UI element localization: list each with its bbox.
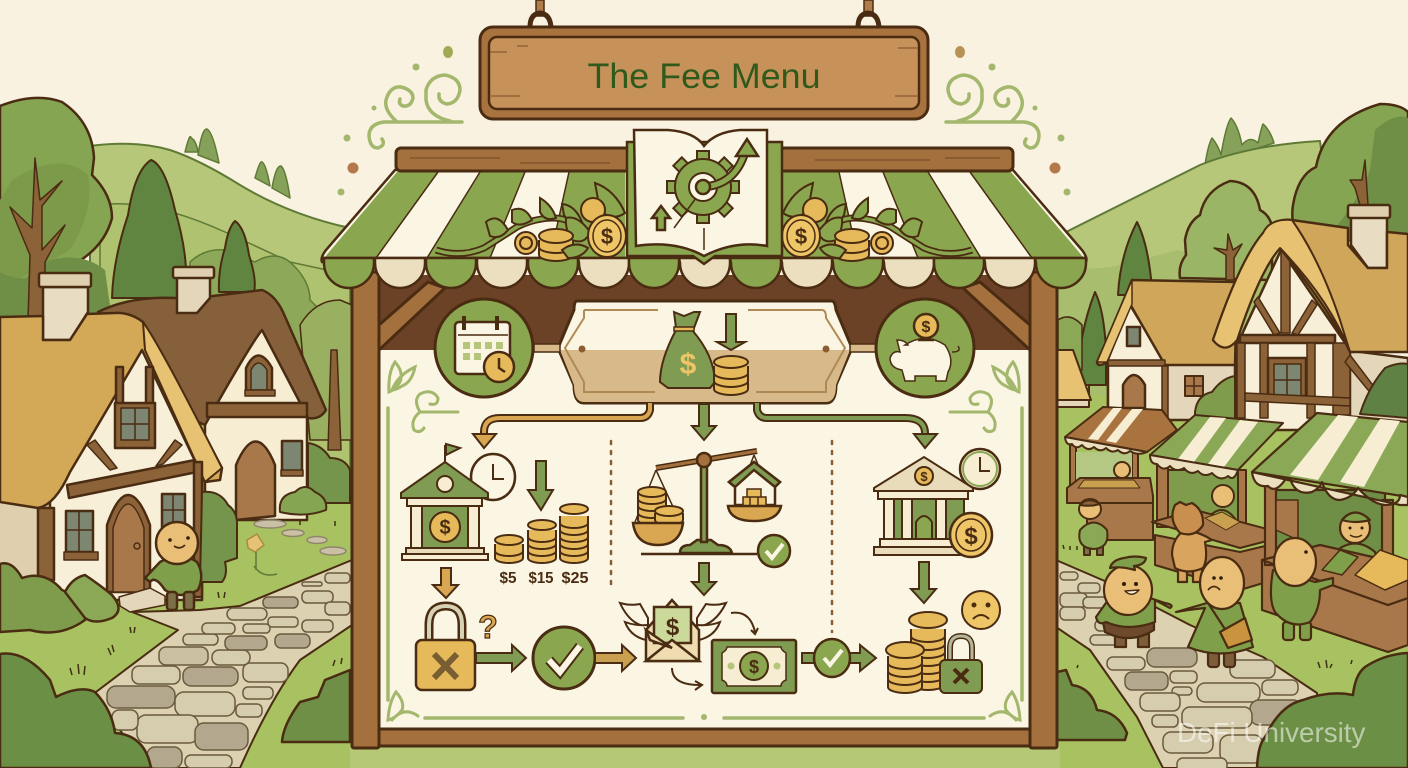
panel ornaments (388, 362, 1022, 720)
tree: conifer (112, 160, 186, 298)
stones: left (107, 573, 350, 768)
bush: behind villager (200, 492, 237, 582)
house: far thatched (1057, 350, 1091, 407)
connector: plaque bars (534, 344, 876, 352)
icon: yellow flower (247, 534, 277, 575)
icon: down arrow (717, 314, 745, 350)
right house of gold (729, 462, 780, 505)
strut: right (963, 282, 1030, 350)
panel: stall interior (378, 285, 1030, 730)
icon: coin stack (714, 356, 748, 395)
tree: conifer (1118, 222, 1153, 295)
bush: far left (1058, 317, 1082, 370)
title: The Fee Menu (588, 57, 820, 96)
vendor: middle stall (1206, 485, 1236, 520)
grass tufts: left (70, 520, 342, 675)
arrow: bank to coins (911, 562, 936, 603)
house: thatched cottage left (0, 273, 222, 612)
ornaments: swirls beside the sign (338, 46, 1070, 196)
arrow: plaque to right column (757, 403, 937, 448)
icon: piggy bank: $ (922, 319, 931, 336)
character: hat villager (1096, 556, 1172, 647)
vines and coins right (783, 183, 972, 261)
coin: right (782, 215, 820, 257)
bushes: right foreground (1057, 653, 1408, 768)
bushes: left front (0, 563, 350, 768)
column 2: balance scale (633, 451, 790, 567)
icon: coin: $ (964, 523, 978, 550)
character: worried villager with satchel (1176, 557, 1253, 667)
icon: open book with gear and growth arrow (627, 130, 782, 264)
awning shade (378, 275, 1030, 350)
icon: calendar with clock (435, 299, 533, 397)
scallops (324, 258, 1086, 288)
left countryside (0, 98, 352, 768)
coin: left (588, 215, 626, 257)
post: left (352, 272, 379, 748)
arrow: check to envelope (595, 645, 636, 671)
hill: back (1058, 141, 1340, 300)
grass tufts: right (1063, 545, 1352, 668)
icon: winged envelope with cash (620, 600, 726, 661)
icon: locked coin stacks (886, 612, 982, 693)
hill: back (90, 144, 350, 520)
coin: right: $ (795, 224, 807, 249)
stones: right (1060, 572, 1302, 768)
tree: small conifer (219, 221, 255, 292)
icon: winged envelope with cash: $ (666, 614, 680, 641)
path: right cobblestones (1056, 560, 1320, 768)
arrow: into coin stacks (528, 461, 553, 510)
path: left cobblestones (92, 560, 352, 768)
stall: wooden frame and panel (352, 272, 1057, 748)
icon: clock (471, 454, 515, 500)
icon: locked with question (416, 606, 498, 690)
coin: left: $ (601, 224, 613, 249)
beam: awning top (396, 148, 1013, 171)
column 1: community bank with clock (401, 444, 515, 560)
left coins (638, 487, 683, 525)
icon: check circle (533, 627, 595, 689)
arrow: plaque to left column (473, 403, 650, 448)
bush: small by cottage (280, 487, 326, 515)
hill: front (100, 204, 350, 520)
vendor head (1114, 462, 1130, 478)
tree: big round left (0, 98, 112, 330)
icon: money bag: $ (680, 348, 697, 381)
chart: rising coin stacks (495, 504, 589, 587)
label: $15: $15 (528, 570, 554, 587)
post: right (1030, 272, 1057, 748)
panel: central plaque with money bag (558, 301, 852, 403)
column 3: bank with clock and coin (874, 449, 1000, 557)
icon: piggy bank (876, 299, 974, 397)
ground right (1056, 395, 1408, 768)
icon: locked with question: ? (478, 609, 498, 645)
check badge (758, 535, 790, 567)
bush: behind cottage right (307, 443, 350, 503)
chimney: thatched cottage (39, 273, 91, 340)
bushes behind cottages (190, 250, 330, 360)
house: small thatched (1097, 280, 1237, 420)
label: $5: $5 (500, 570, 517, 587)
arrow: scale to envelope (692, 563, 716, 595)
arrow: curved to bill (731, 613, 758, 634)
label: $25: $25 (562, 570, 589, 587)
beam: bottom (379, 729, 1030, 746)
distant hill trees (1205, 118, 1274, 165)
gear (667, 151, 739, 223)
dotted column dividers (611, 441, 832, 632)
sign: the fee menu (480, 0, 928, 119)
arrow: lock to check (476, 645, 526, 671)
stepping stones (254, 520, 346, 555)
bush: between houses (1195, 376, 1235, 420)
icon: clock (960, 449, 1000, 489)
ground left (0, 500, 352, 768)
ground under stall (350, 745, 1060, 768)
icon: banknote: $ (749, 657, 759, 677)
icon: money bag (660, 312, 715, 388)
strut: left (379, 282, 445, 350)
bush: right of big house (1360, 364, 1408, 418)
vines and coins left (436, 183, 625, 261)
tree: right of cottage (300, 300, 352, 450)
distant hill trees (185, 129, 290, 198)
tree: conifer lower (1078, 292, 1106, 385)
hill: lower (1058, 250, 1340, 500)
icon: bank: $ (920, 469, 928, 484)
stall: front market stall (1252, 413, 1408, 652)
icon: sad face (962, 591, 1000, 629)
arrow: curved from envelope (672, 668, 702, 690)
house: big thatched right (1213, 205, 1408, 440)
tree: big round right (1292, 104, 1408, 240)
chimney: brown cottage (173, 267, 214, 313)
stall: middle market stall (1150, 415, 1290, 590)
arrow: plaque to middle column (692, 404, 716, 440)
character: small visitor (1079, 499, 1107, 555)
character: back-turned villager (1271, 538, 1333, 640)
watermark: DeFi University (1177, 717, 1366, 748)
icon: bank: $ (439, 517, 451, 539)
character: left villager (145, 522, 201, 610)
house: brown roof cottage (98, 267, 326, 520)
vendor: front stall (1335, 512, 1378, 565)
character: bear-like visitor (1172, 502, 1212, 582)
awning (322, 170, 1086, 288)
arrow: bank to lock (433, 568, 458, 598)
chimney: big house (1348, 205, 1390, 268)
icon: banknote (712, 640, 796, 693)
stall: small brown market stall (1065, 407, 1177, 540)
right countryside (1056, 104, 1408, 768)
arrow: bill to coins with check (802, 639, 876, 677)
tree: mid round (1180, 181, 1272, 280)
